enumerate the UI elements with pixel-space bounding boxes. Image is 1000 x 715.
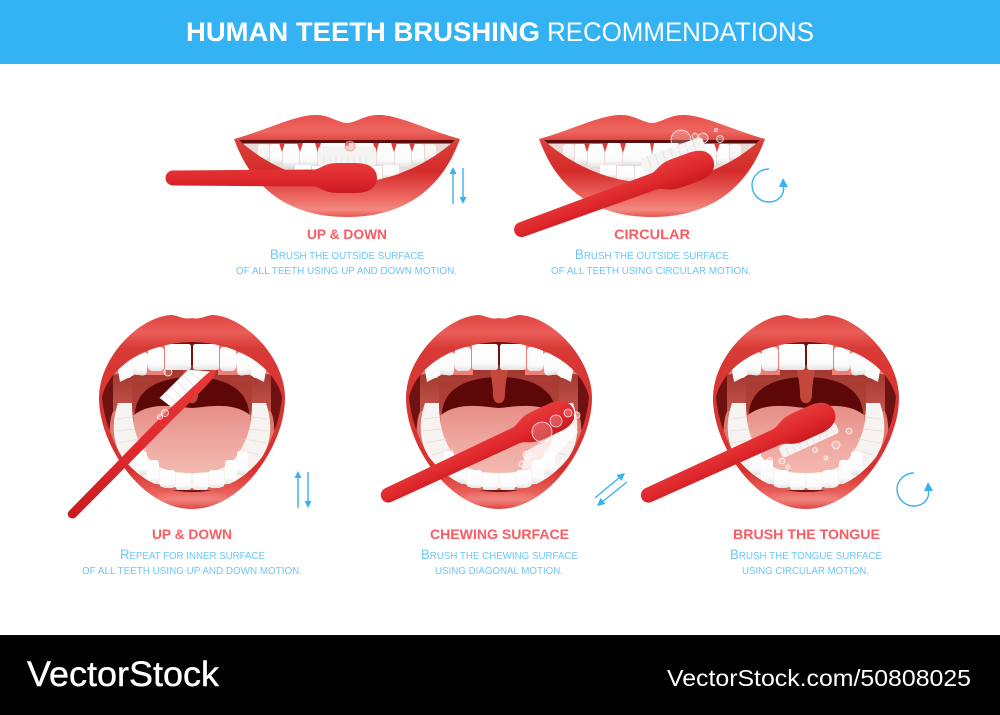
toothbrush with foam xyxy=(635,397,852,512)
heading: BRUSH THE TONGUE xyxy=(733,526,880,542)
description: BRUSH THE CHEWING SURFACE xyxy=(421,547,578,562)
toothbrush with foam xyxy=(509,128,724,246)
arrows up and down xyxy=(294,471,312,508)
mouth open xyxy=(711,315,901,509)
heading: UP & DOWN xyxy=(152,526,232,542)
description: OF ALL TEETH USING UP AND DOWN MOTION. xyxy=(82,566,302,577)
description: OF ALL TEETH USING UP AND DOWN MOTION. xyxy=(236,266,457,277)
panel: circular outer xyxy=(509,115,788,277)
arrows up and down xyxy=(450,167,466,204)
description: USING DIAGONAL MOTION. xyxy=(435,566,563,577)
panel: chewing surface xyxy=(375,315,627,577)
description: OF ALL TEETH USING CIRCULAR MOTION. xyxy=(551,266,751,277)
arrows diagonal xyxy=(595,473,627,506)
header banner xyxy=(0,0,1000,64)
footer url text: VectorStock.com/50808025 xyxy=(667,665,971,691)
footer logo text: VectorStock xyxy=(27,655,220,694)
heading: CIRCULAR xyxy=(614,226,690,242)
panel: up and down inner xyxy=(68,315,312,577)
arrow circular xyxy=(752,169,788,202)
description xyxy=(730,547,882,577)
description: BRUSH THE OUTSIDE SURFACE xyxy=(270,247,424,262)
title: HUMAN TEETH BRUSHING xyxy=(186,17,540,47)
description xyxy=(421,547,578,577)
mouth open xyxy=(97,315,287,509)
description: BRUSH THE OUTSIDE SURFACE xyxy=(575,247,729,262)
arrow circular xyxy=(897,473,933,506)
description: BRUSH THE TONGUE SURFACE xyxy=(730,547,882,562)
footer bar xyxy=(0,635,1000,715)
description xyxy=(82,547,302,577)
description: USING CIRCULAR MOTION. xyxy=(742,566,869,577)
heading: UP & DOWN xyxy=(307,226,387,242)
heading: CHEWING SURFACE xyxy=(430,526,569,542)
description xyxy=(236,247,457,277)
mouth open xyxy=(404,315,594,509)
toothbrush with foam xyxy=(375,395,580,512)
panel: up and down outer xyxy=(166,115,466,277)
mouth closed xyxy=(539,115,765,217)
title: RECOMMENDATIONS xyxy=(547,17,814,47)
thin toothbrush xyxy=(68,352,218,518)
toothbrush xyxy=(166,141,377,193)
description: REPEAT FOR INNER SURFACE xyxy=(120,547,265,562)
panel: brush the tongue xyxy=(635,315,933,577)
description xyxy=(551,247,751,277)
mouth closed xyxy=(234,115,460,217)
